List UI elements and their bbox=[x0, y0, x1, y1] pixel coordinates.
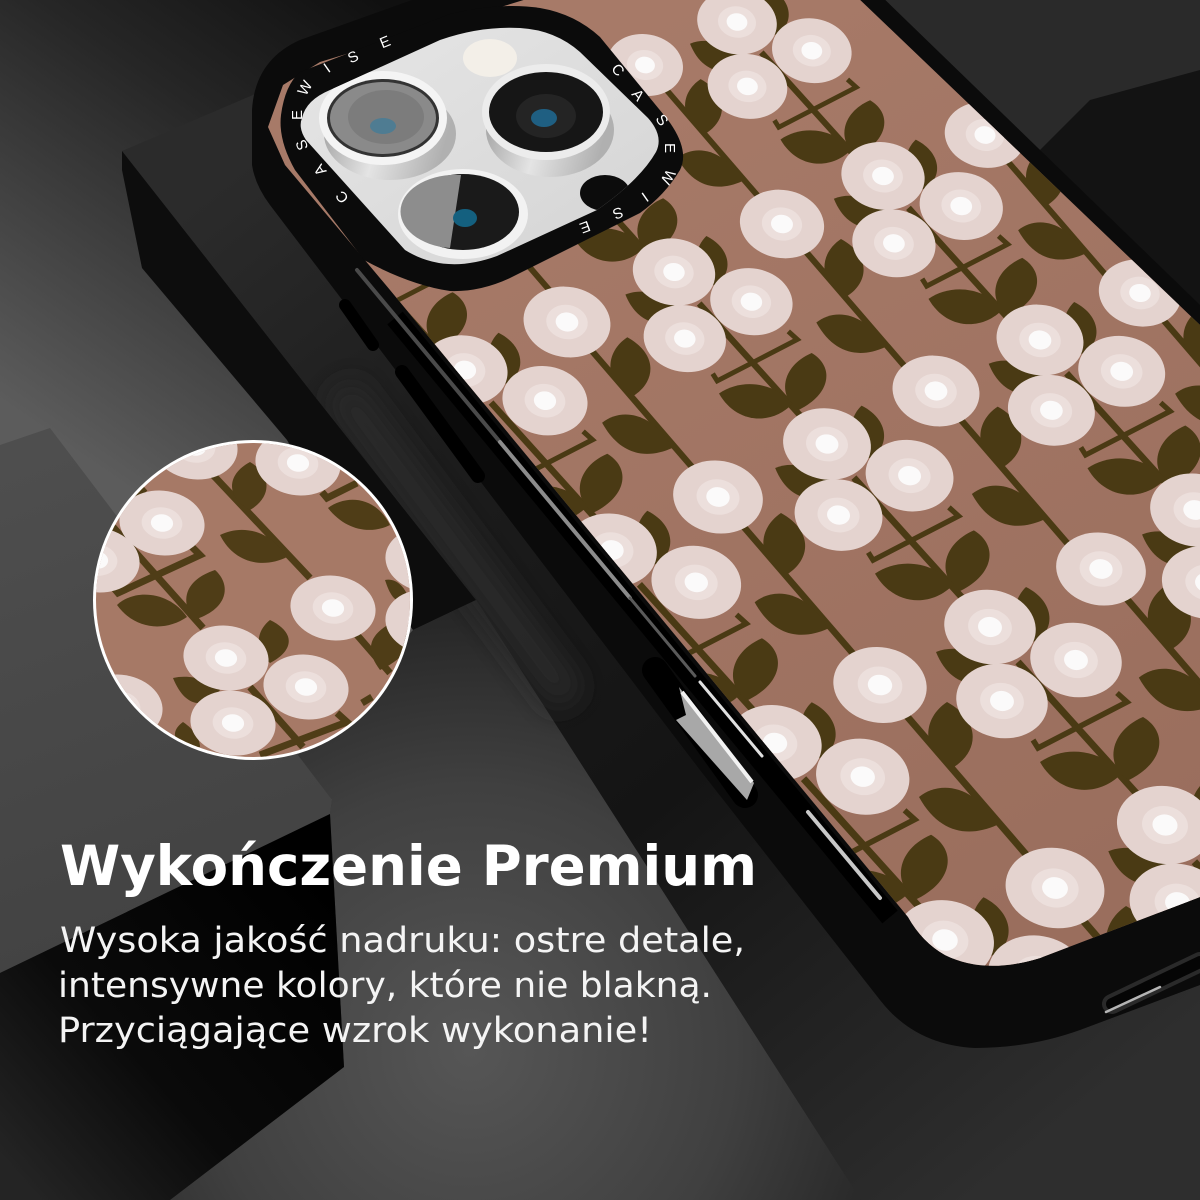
camera ring bbox=[281, 6, 683, 291]
CASEWISE ring lettering: W bbox=[656, 166, 678, 188]
CASEWISE ring lettering: S bbox=[610, 203, 625, 222]
flash bbox=[463, 39, 517, 77]
CASEWISE ring lettering: S bbox=[652, 111, 671, 129]
CASEWISE ring lettering: A bbox=[311, 161, 330, 179]
lenses bbox=[319, 39, 630, 259]
CASEWISE ring lettering: C bbox=[608, 61, 628, 80]
camera glass window bbox=[301, 28, 659, 264]
CASEWISE ring lettering: A bbox=[628, 86, 647, 105]
CASEWISE ring lettering: W bbox=[295, 77, 317, 99]
lens top left bbox=[319, 71, 456, 180]
CASEWISE ring lettering bbox=[289, 33, 678, 236]
inset: close-up circle of print bbox=[93, 440, 413, 760]
CASEWISE ring lettering: E bbox=[661, 143, 678, 153]
pattern: flowers bbox=[417, 0, 1200, 1023]
patterned back of the case bbox=[268, 0, 1200, 966]
inset flowers bbox=[96, 444, 410, 756]
CASEWISE ring lettering: S bbox=[345, 48, 361, 67]
lens bottom bbox=[398, 169, 528, 259]
charging port bbox=[1106, 962, 1200, 1012]
description text: intensywne kolory, które nie blakną. bbox=[58, 966, 712, 1006]
CASEWISE ring lettering: S bbox=[293, 137, 312, 152]
CASEWISE ring lettering: E bbox=[377, 33, 393, 52]
CASEWISE ring lettering: C bbox=[332, 187, 352, 206]
CASEWISE ring lettering: E bbox=[577, 217, 592, 236]
CASEWISE ring lettering: E bbox=[289, 110, 306, 120]
side buttons bbox=[345, 305, 754, 800]
title: Wykończenie Premium bbox=[60, 834, 757, 898]
phone case body bbox=[252, 0, 1200, 1048]
CASEWISE ring lettering: I bbox=[321, 60, 334, 77]
description text: Wysoka jakość nadruku: ostre detale, bbox=[60, 921, 745, 961]
camera bump bbox=[281, 6, 683, 291]
CASEWISE ring lettering: I bbox=[638, 188, 651, 205]
description text: Przyciągające wzrok wykonanie! bbox=[58, 1011, 652, 1051]
mic hole bbox=[580, 175, 630, 211]
inset stems and leaves bbox=[113, 462, 410, 755]
description text bbox=[58, 921, 745, 1051]
lens top right bbox=[482, 64, 614, 177]
pattern: stems and leaves bbox=[270, 0, 1200, 1152]
case rim gloss bbox=[357, 270, 890, 917]
